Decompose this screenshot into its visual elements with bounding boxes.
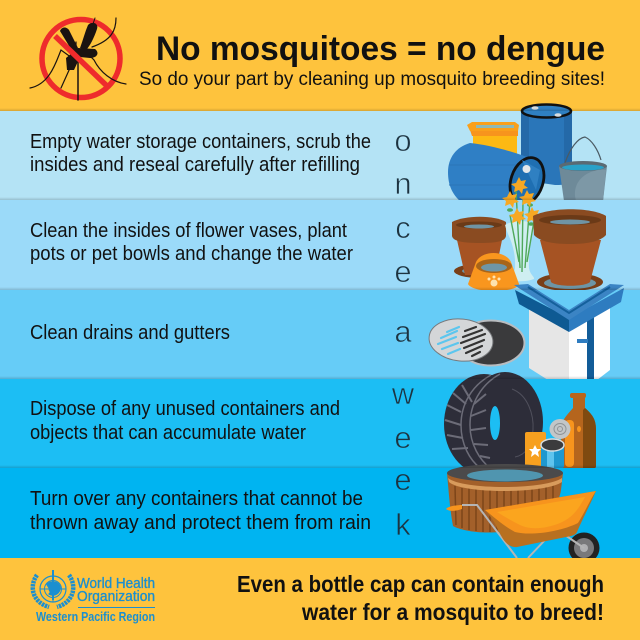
text: thrown away and protect them from rain xyxy=(30,512,371,534)
vertical text: once a week: c xyxy=(395,210,411,245)
text: step 1: Empty water storage containers, scrub the xyxy=(30,131,371,153)
callout: bottle cap: water for a mosquito to breed! xyxy=(301,599,604,625)
yellow bin xyxy=(467,122,519,165)
callout: bottle cap xyxy=(237,571,604,625)
icon: drain cover xyxy=(427,316,524,366)
bucket xyxy=(559,137,607,201)
logo text: Western Pacific Region xyxy=(36,609,155,624)
vertical text: once a week: a xyxy=(394,314,412,349)
panel: band 3 background xyxy=(0,290,640,380)
footer background xyxy=(0,558,640,640)
logo: World Health Organization emblem xyxy=(33,570,73,607)
icon: gutter on building corner xyxy=(514,284,624,380)
lying blue barrel xyxy=(448,143,550,209)
icon: no mosquito sign xyxy=(30,18,126,100)
large flower pot xyxy=(533,209,606,291)
small flower pot xyxy=(452,217,506,278)
vertical text: once a week: n xyxy=(394,166,412,201)
panel: band 1 background xyxy=(0,111,640,201)
vertical text: once a week: e xyxy=(394,420,412,455)
orange can xyxy=(525,432,546,468)
text: objects that can accumulate water xyxy=(30,422,306,444)
vertical text: once a week: e xyxy=(394,254,412,289)
text: step 5: Turn over any containers that cannot be xyxy=(30,488,363,510)
panel: band 4 background xyxy=(0,379,640,469)
vertical text: once a week: e xyxy=(394,462,412,497)
pet bowl xyxy=(468,253,519,291)
icon: wicker basket xyxy=(447,464,563,533)
logo text: World Health xyxy=(77,576,155,592)
vertical text: once a week xyxy=(391,123,415,542)
text: step 3: Clean drains and gutters xyxy=(30,322,230,344)
vertical text: once a week: k xyxy=(395,507,411,542)
icon: water containers xyxy=(448,104,607,209)
panel: band 2 background xyxy=(0,200,640,291)
brown bottle xyxy=(561,393,596,469)
title: No mosquitoes = no dengue xyxy=(156,30,605,68)
text: insides and reseal carefully after refilling xyxy=(30,154,360,176)
logo text: Organization xyxy=(77,589,155,605)
panel: band 5 background xyxy=(0,468,640,559)
logo text xyxy=(36,576,155,624)
text: step 4: Dispose of any unused containers and xyxy=(30,398,340,420)
blue can xyxy=(541,439,564,469)
vertical text: once a week: w xyxy=(391,376,415,411)
icon: bottle and cans xyxy=(525,393,596,469)
header background xyxy=(0,0,640,112)
text: pots or pet bowls and change the water xyxy=(30,243,353,265)
icon: tyre xyxy=(444,372,543,474)
vase with flowers xyxy=(502,177,541,281)
vertical text: once a week: o xyxy=(394,123,412,158)
upright blue barrel xyxy=(521,104,572,185)
callout: bottle cap: Even a bottle cap can contain enough xyxy=(237,571,604,597)
icon: pots, vase and pet bowl xyxy=(452,177,606,291)
subtitle: So do your part by cleaning up mosquito breeding sites! xyxy=(139,69,605,90)
text: step 2: Clean the insides of flower vases, plant xyxy=(30,220,347,242)
icon: wheelbarrow xyxy=(446,491,600,564)
can lid xyxy=(550,419,570,439)
